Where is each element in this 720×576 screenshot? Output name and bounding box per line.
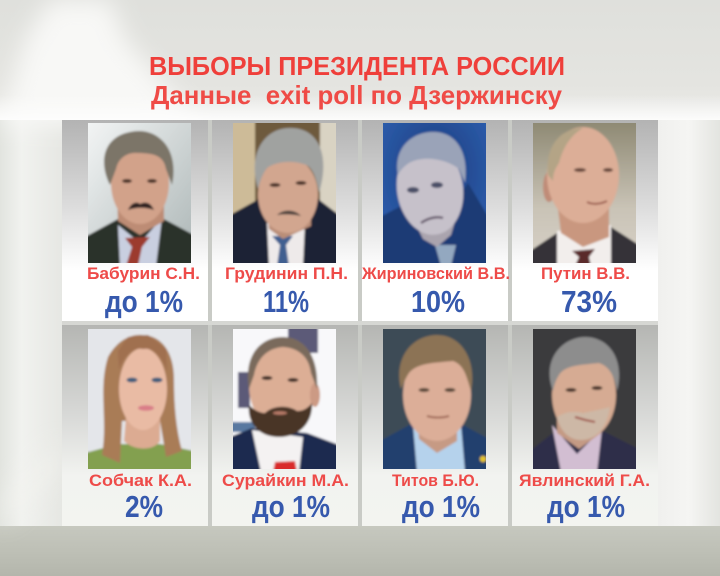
- photo: Путин: [533, 123, 636, 263]
- name: Собчак К.А.: [89, 471, 192, 490]
- card: Жириновский: [361, 120, 510, 321]
- photo: Титов: [383, 329, 486, 469]
- card: Явлинский: [512, 325, 658, 526]
- gutters: [62, 120, 658, 526]
- percent: 10%: [411, 284, 465, 319]
- percent: 73%: [561, 284, 617, 319]
- card: Собчак: [62, 325, 208, 526]
- card: Путин: [512, 120, 658, 321]
- photo: Жириновский: [383, 123, 486, 263]
- heading line 1: ВЫБОРЫ ПРЕЗИДЕНТА РОССИИ: [149, 51, 565, 81]
- card: Грудинин: [212, 120, 358, 321]
- name: Явлинский Г.А.: [519, 471, 650, 490]
- heading line 2: Данные exit poll по Дзержинску: [151, 80, 563, 110]
- percent: до 1%: [402, 489, 480, 524]
- card: Бабурин: [62, 120, 208, 321]
- photo: Явлинский: [533, 329, 636, 469]
- percent: до 1%: [252, 489, 330, 524]
- name: Путин В.В.: [541, 264, 630, 283]
- photo: Бабурин: [88, 123, 191, 263]
- name: Грудинин П.Н.: [225, 264, 348, 283]
- name: Титов Б.Ю.: [392, 471, 479, 490]
- photo: Собчак: [88, 329, 191, 469]
- percent: до 1%: [547, 489, 625, 524]
- name: Сурайкин М.А.: [222, 471, 349, 490]
- percent: 11%: [263, 284, 309, 319]
- percent: 2%: [125, 489, 163, 524]
- photo: Сурайкин: [233, 329, 336, 469]
- percent: до 1%: [105, 284, 183, 319]
- name: Жириновский В.В.: [361, 264, 510, 283]
- name: Бабурин С.Н.: [87, 264, 200, 283]
- card: Титов: [362, 325, 508, 526]
- title: [149, 51, 565, 110]
- photo: Грудинин: [233, 123, 336, 263]
- card: Сурайкин: [212, 325, 358, 526]
